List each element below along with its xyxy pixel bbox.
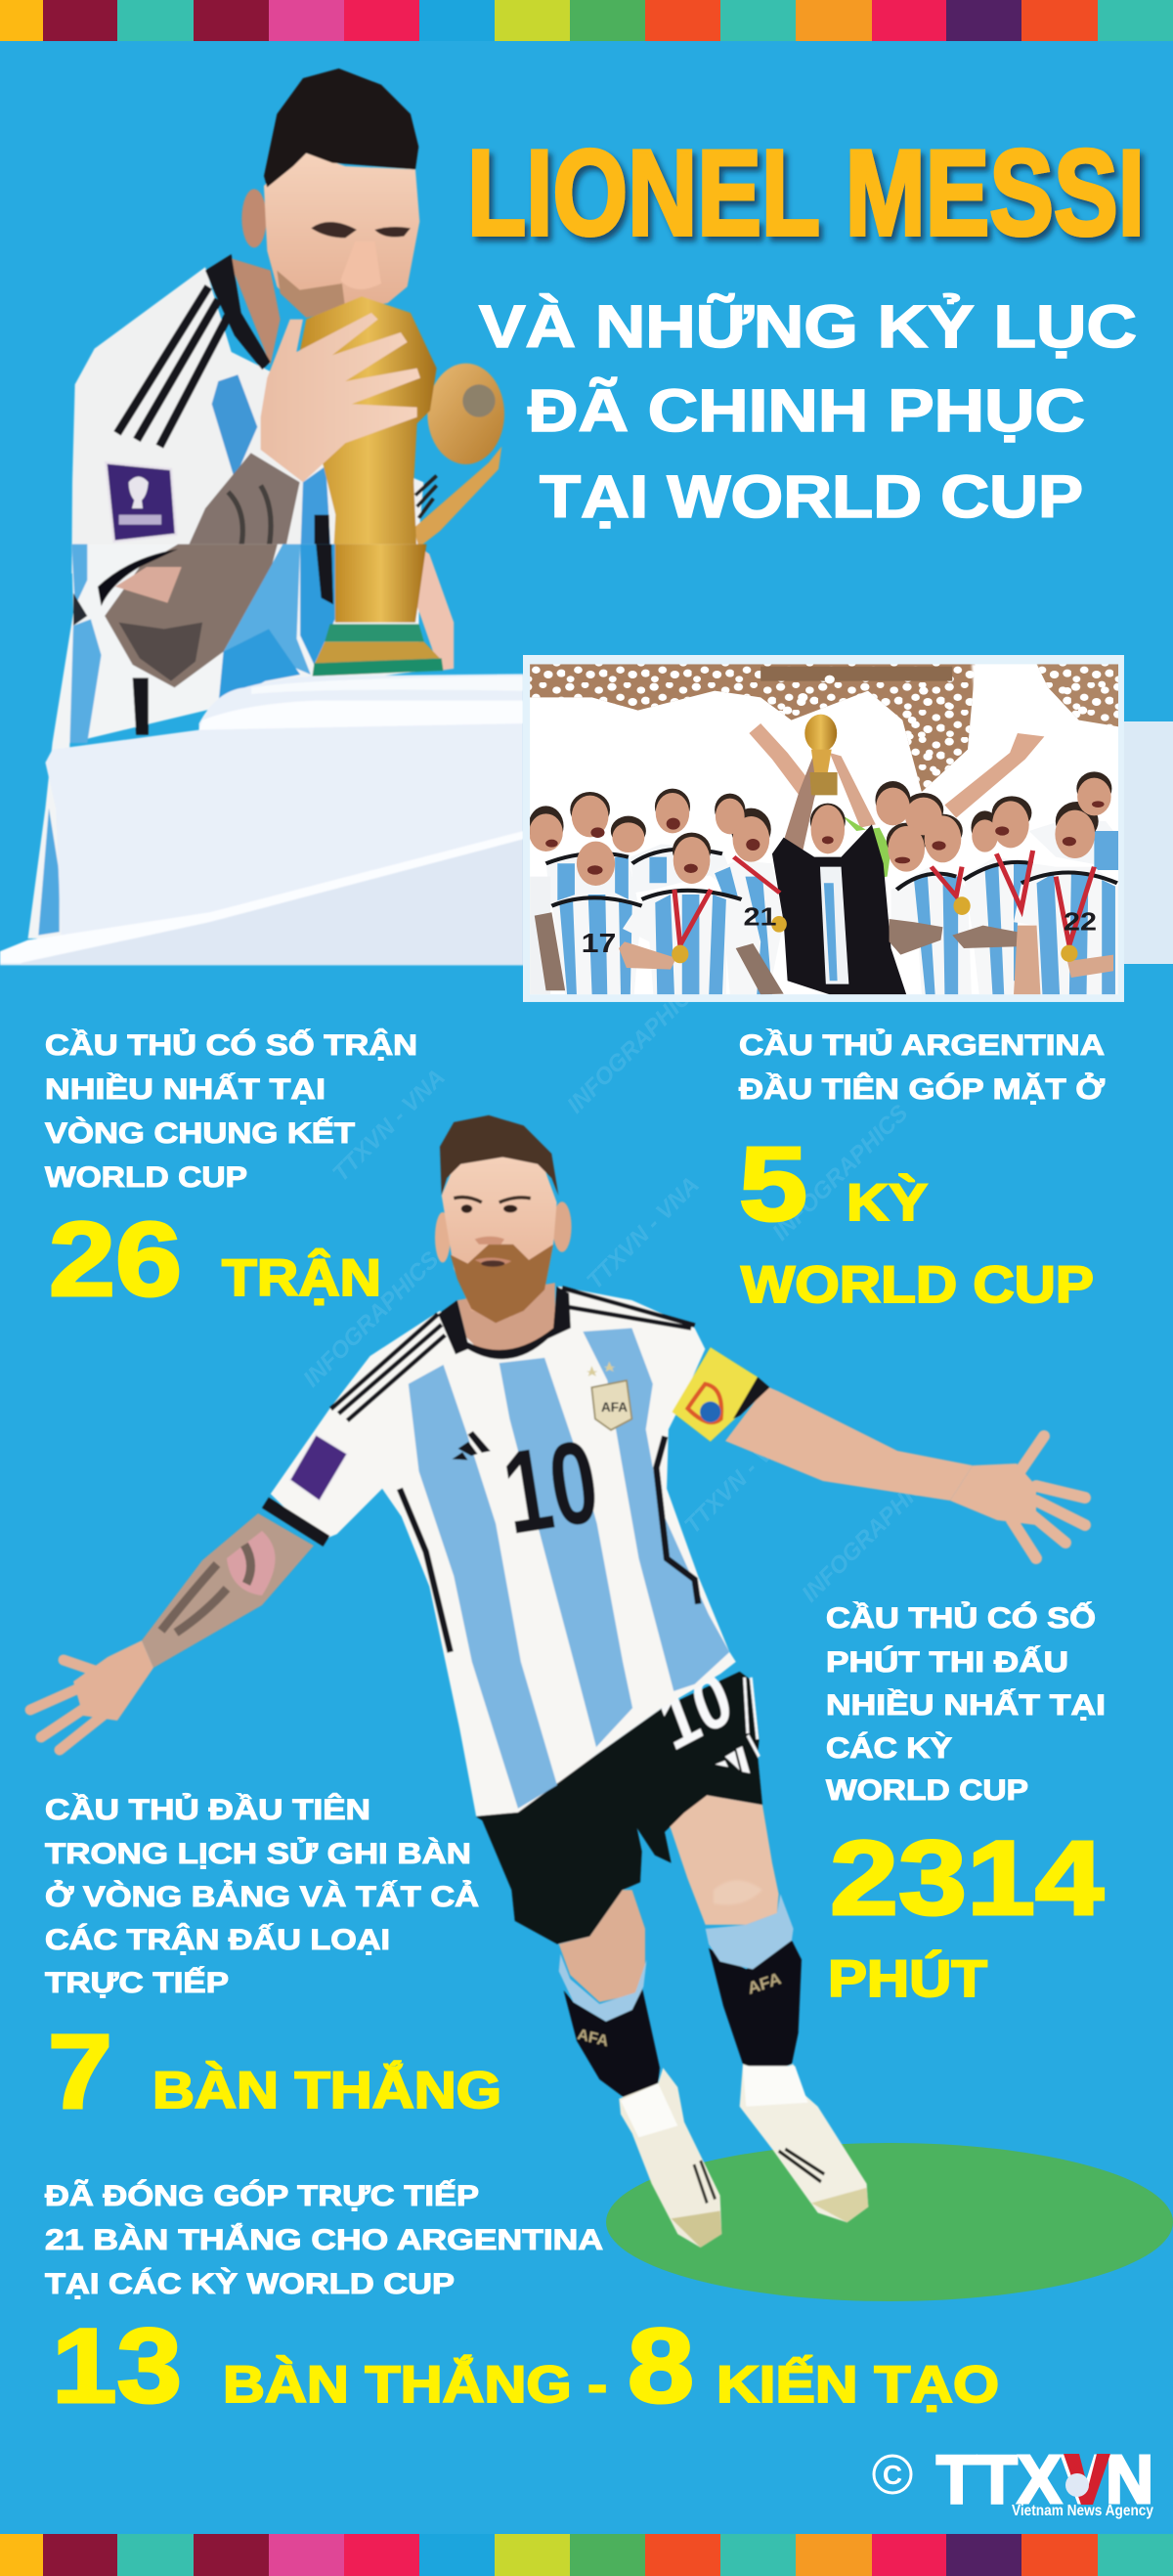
lower jersey and podium — [0, 545, 524, 965]
watermarks: TTXVN - VNA — [327, 1065, 451, 1187]
stat: five world cups: ĐẦU TIÊN GÓP MẶT Ở — [739, 1072, 1105, 1106]
stat: goals and assists: 13 — [52, 2306, 182, 2424]
stat: scored in every stage: CÁC TRẬN ĐẤU LOẠI — [45, 1923, 390, 1956]
photo: Messi kissing the trophy — [0, 68, 524, 965]
stat: goals and assists: ĐÃ ĐÓNG GÓP TRỰC TIẾP — [45, 2179, 479, 2212]
right sock: AFA — [746, 1968, 783, 1998]
watermarks: INFOGRAPHICS — [797, 1462, 942, 1607]
player: Messi celebrating — [30, 1115, 1085, 2248]
shirt numbers — [583, 907, 1096, 952]
stat: five world cups: 5 — [739, 1124, 807, 1243]
shirt number: 10 — [495, 1415, 607, 1559]
stat: scored in every stage: CẦU THỦ ĐẦU TIÊN — [45, 1793, 370, 1826]
stat: most matches: TRẬN — [222, 1247, 381, 1307]
copyright symbol — [874, 2456, 911, 2493]
stat: scored in every stage: BÀN THẮNG — [152, 2060, 501, 2119]
faces — [529, 778, 1111, 886]
sleeve cuff — [265, 1503, 326, 1541]
back row jerseys — [530, 821, 1118, 994]
stat: most matches — [45, 1028, 417, 1318]
stat: goals and assists: KIẾN TẠO — [717, 2355, 999, 2414]
neck and collar — [228, 257, 281, 365]
stat: most minutes: NHIỀU NHẤT TẠI — [826, 1688, 1106, 1722]
blue stripes — [409, 1329, 729, 1809]
stat: goals and assists: TẠI CÁC KỲ WORLD CUP — [45, 2267, 455, 2300]
bottom colour bar — [0, 2534, 1173, 2576]
head — [435, 1115, 572, 1323]
front jerseys — [551, 857, 1118, 994]
side panels — [400, 1436, 698, 1652]
legs and shorts — [476, 1655, 868, 2248]
left boot — [619, 2068, 721, 2248]
lower arms — [535, 912, 1113, 994]
collar — [438, 1287, 571, 1359]
AFA crest: AFA — [601, 1400, 628, 1415]
shirt numbers: 17 — [582, 929, 616, 958]
stat: most matches: 26 — [49, 1200, 182, 1318]
tattooed forearm — [176, 453, 300, 574]
copyright symbol: C — [883, 2460, 902, 2490]
stat: scored in every stage — [45, 1793, 501, 2130]
stat: most minutes: WORLD CUP — [826, 1774, 1028, 1807]
collars and sleeve stripes — [546, 849, 1117, 906]
hair — [530, 771, 1112, 856]
open mouths — [545, 801, 1105, 875]
subtitle: TẠI WORLD CUP — [540, 463, 1083, 530]
stat: scored in every stage: TRỰC TIẾP — [45, 1966, 229, 1999]
neck — [457, 1283, 555, 1360]
stat: five world cups: CẦU THỦ ARGENTINA — [739, 1028, 1105, 1062]
stat: five world cups: WORLD CUP — [741, 1256, 1094, 1314]
black robe — [772, 824, 906, 994]
AFA crest — [586, 1361, 631, 1430]
head — [241, 68, 419, 318]
shirt numbers: 22 — [1064, 908, 1097, 937]
watermarks — [298, 973, 942, 1607]
stat: most minutes: 2314 — [830, 1818, 1104, 1937]
shirt and head — [265, 1115, 769, 1816]
subtitle — [479, 293, 1137, 530]
stat: goals and assists: 8 — [628, 2306, 694, 2424]
stat: most minutes: CẦU THỦ CÓ SỐ — [826, 1601, 1096, 1635]
stat: scored in every stage: 7 — [48, 2012, 112, 2130]
captain armband — [672, 1347, 769, 1442]
watermarks: TTXVN - VNA — [582, 1172, 705, 1294]
green pitch ellipse — [606, 2143, 1173, 2301]
stat: five world cups — [739, 1028, 1105, 1314]
number on shorts: 10 — [649, 1655, 743, 1768]
shirt — [271, 1287, 736, 1816]
hand — [261, 313, 420, 482]
top colour bar — [0, 0, 1173, 41]
fireworks — [530, 664, 1118, 792]
stat: most matches: NHIỀU NHẤT TẠI — [45, 1072, 326, 1106]
stat: most minutes: CÁC KỲ — [826, 1731, 952, 1765]
stat: goals and assists — [45, 2179, 999, 2424]
logo: TTXVN: Vietnam News Agency — [1012, 2503, 1153, 2519]
golden ball and stand — [413, 364, 504, 547]
goalkeeper green kit — [845, 817, 890, 878]
stat: scored in every stage: TRONG LỊCH SỬ GHI BÀN — [45, 1837, 471, 1870]
upper body — [71, 68, 504, 574]
sleeve badge — [289, 1434, 347, 1501]
watermarks: INFOGRAPHICS — [767, 1100, 913, 1245]
adidas mark — [452, 1431, 491, 1461]
sleeve badge — [106, 462, 176, 542]
watermarks: INFOGRAPHICS — [298, 1246, 444, 1392]
stat: most matches: WORLD CUP — [45, 1161, 247, 1194]
stat: goals and assists: 21 BÀN THẮNG CHO ARGENTINA — [45, 2223, 603, 2256]
jersey — [71, 267, 423, 574]
right thigh — [668, 1795, 779, 1925]
medals — [672, 851, 1094, 963]
stat: most minutes: PHÚT THI ĐẤU — [826, 1645, 1068, 1679]
Messi shirt — [820, 867, 848, 984]
shirt numbers: 21 — [744, 903, 777, 932]
watermarks: INFOGRAPHICS — [562, 973, 708, 1118]
stat: scored in every stage: Ở VÒNG BẢNG VÀ TẤT CẢ — [45, 1880, 479, 1913]
photo: team celebration — [523, 655, 1124, 1002]
left arm — [30, 1513, 314, 1750]
stat: most minutes: PHÚT — [828, 1949, 987, 2008]
left sock — [559, 1954, 660, 2099]
trophy held up — [804, 715, 838, 795]
stat: goals and assists: BÀN THẮNG - — [223, 2354, 607, 2414]
subtitle: ĐÃ CHINH PHỤC — [528, 377, 1085, 444]
right boot — [740, 2064, 868, 2222]
subtitle: VÀ NHỮNG KỶ LỤC — [479, 293, 1137, 360]
watermarks: TTXVN - VNA — [679, 1417, 803, 1539]
World Cup trophy — [300, 296, 437, 574]
stat: five world cups: KỲ — [847, 1173, 928, 1232]
logo: TTXVN: TTXVN — [936, 2441, 1153, 2517]
raised arms — [749, 723, 1044, 851]
shorts — [476, 1672, 762, 1944]
right pale block behind team photo — [1114, 721, 1173, 964]
stat: most matches: VÒNG CHUNG KẾT — [45, 1116, 355, 1150]
stat: most matches: CẦU THỦ CÓ SỐ TRẬN — [45, 1028, 417, 1062]
right sock — [706, 1894, 802, 2074]
left sock: AFA — [576, 2027, 610, 2050]
stat: most minutes — [826, 1601, 1106, 2008]
shoulder stripes — [331, 1288, 695, 1420]
right arm — [725, 1386, 1085, 1558]
left thigh — [559, 1890, 645, 2002]
